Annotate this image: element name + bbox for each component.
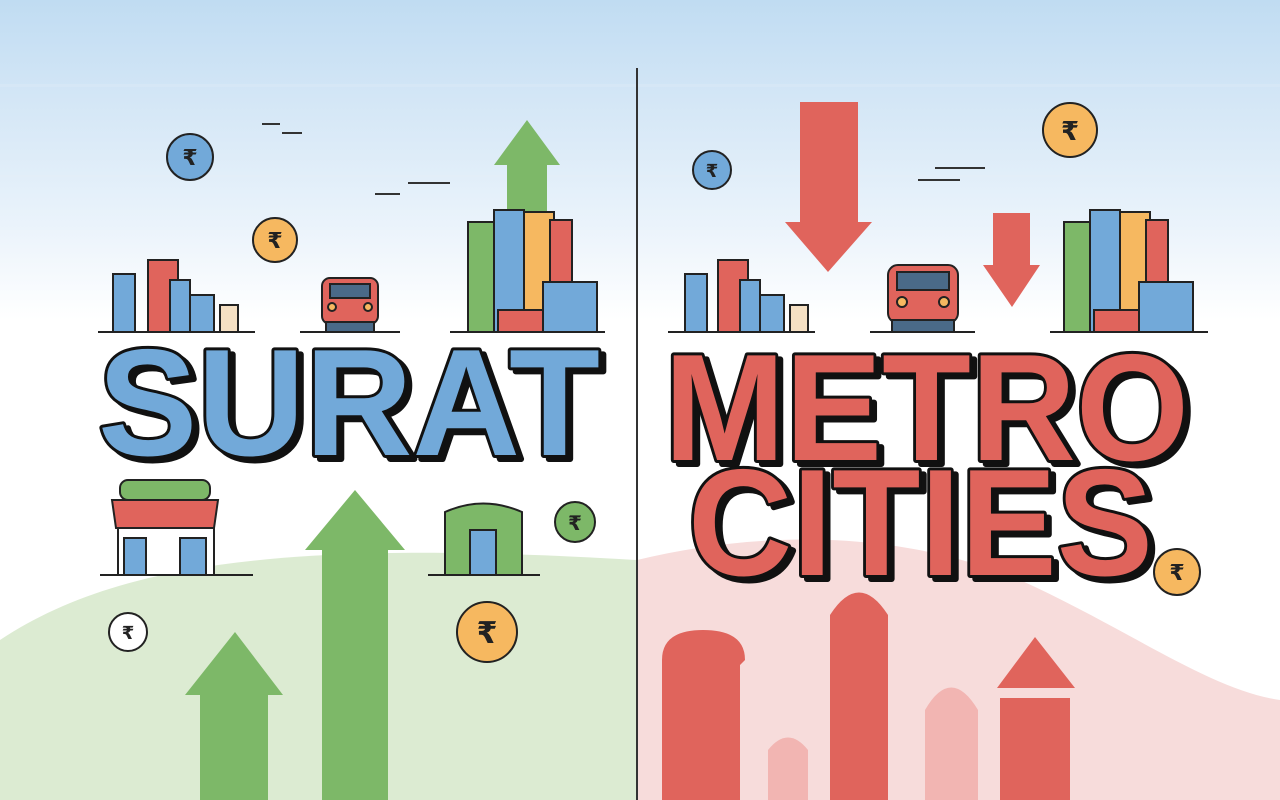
coin: orange right xyxy=(1043,103,1097,157)
arrow: green small xyxy=(185,632,283,800)
coin: orange: ₹ xyxy=(267,228,283,253)
tall building left xyxy=(450,210,605,332)
arrow: red down small xyxy=(983,213,1040,307)
arrow: green up top xyxy=(494,120,560,215)
background sky xyxy=(0,0,1280,320)
coin: blue right: ₹ xyxy=(706,161,718,181)
skyline right xyxy=(668,260,815,332)
bars: red bottom xyxy=(662,592,1075,800)
car right xyxy=(870,265,975,332)
coin: blue xyxy=(167,134,213,180)
title: SURAT: SURAT xyxy=(98,318,600,488)
tall building right xyxy=(1050,210,1208,332)
coin: green xyxy=(555,502,595,542)
green small building xyxy=(428,504,540,575)
coin: blue: ₹ xyxy=(182,145,198,170)
green hill xyxy=(0,553,637,800)
coin: orange big xyxy=(457,602,517,662)
title: METRO: METRO xyxy=(669,327,1194,497)
coin: blue right xyxy=(693,151,731,189)
coin: orange big: ₹ xyxy=(477,617,497,650)
divider xyxy=(636,68,638,800)
skyline left xyxy=(98,260,255,332)
arrow: red down big xyxy=(785,102,872,272)
shop xyxy=(100,480,253,575)
title: METRO: METRO xyxy=(664,323,1189,493)
coin: orange right: ₹ xyxy=(1061,116,1079,146)
car left xyxy=(300,278,400,332)
coin: green: ₹ xyxy=(568,513,582,535)
coin: white: ₹ xyxy=(122,623,134,643)
coin: white xyxy=(109,613,147,651)
title: CITIES: CITIES xyxy=(688,438,1153,608)
coin: orange xyxy=(253,218,297,262)
title: CITIES: CITIES xyxy=(693,442,1158,612)
coin: orange right bottom xyxy=(1154,549,1200,595)
dashes xyxy=(262,124,985,194)
arrow: green big xyxy=(305,490,405,800)
title: SURAT: SURAT xyxy=(103,322,605,492)
coin: orange right bottom: ₹ xyxy=(1169,560,1185,585)
pink hill xyxy=(637,540,1280,800)
